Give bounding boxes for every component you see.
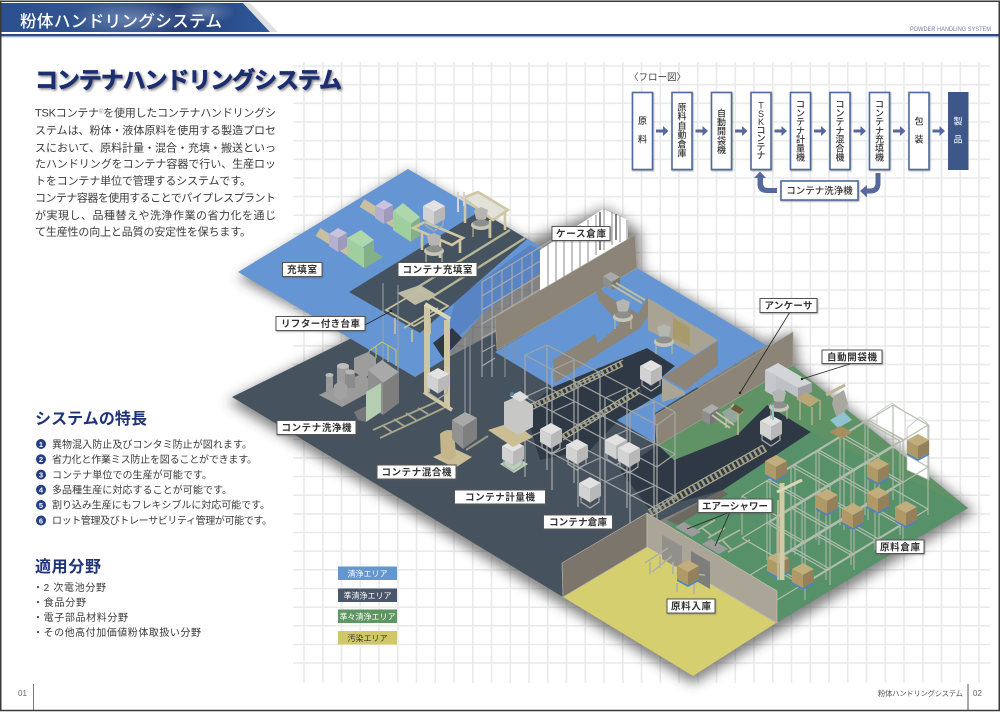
washer box: コンテナ洗浄機 (786, 185, 853, 197)
label: raw material warehouse (876, 540, 924, 554)
lifter tower (424, 304, 452, 410)
floor: darker pocket (525, 348, 675, 460)
label: uncaser (739, 298, 817, 394)
footer left: 01 (18, 689, 27, 698)
applications list: ・その他高付加価値粉体取扱い分野 (33, 626, 201, 639)
label: uncaser: アンケーサ (764, 301, 812, 312)
label: container warehouse: コンテナ倉庫 (549, 516, 607, 528)
machine block 1 (318, 228, 383, 268)
flow boxes: T (758, 100, 764, 110)
flow boxes: 動 (717, 117, 726, 128)
flow boxes: ナ (796, 126, 805, 136)
wall: long right wall (655, 332, 793, 446)
wall: goods-in back right (647, 513, 777, 623)
label: filling room: 充填室 (287, 264, 317, 276)
floor: contaminated yellow (563, 547, 776, 676)
wall: room back (648, 298, 718, 355)
flow boxes: 計 (796, 134, 805, 145)
flow boxes: 量 (796, 144, 805, 154)
applications list: ・2 次電池分野 (33, 581, 106, 594)
flow boxes: 自 (717, 108, 726, 118)
air shower doors (662, 535, 710, 589)
flow boxes: 機 (796, 151, 805, 162)
label: air shower (687, 499, 772, 546)
feature list: 6 (39, 516, 43, 525)
feature list: 割り込み生産にもフレキシブルに対応可能です。 (52, 499, 270, 512)
footer right: 02 (973, 689, 982, 698)
plant illustration (228, 169, 975, 684)
flow boxes: テ (756, 142, 766, 152)
small machine in clean room (603, 272, 645, 303)
floor: container filling room (349, 211, 527, 333)
conveyor in goods-in (645, 548, 705, 594)
flow boxes: テ (875, 117, 884, 127)
flow boxes: ン (835, 108, 845, 118)
applications list: ・食品分野 (33, 597, 86, 609)
rack: grey grid behind wall (482, 240, 552, 377)
conveyor near washer (373, 402, 444, 438)
walls: air shower rear wall (667, 490, 728, 525)
label: container filling room: コンテナ充填室 (402, 264, 472, 276)
feature list: 5 (39, 501, 43, 510)
flow boxes: ン (756, 134, 766, 144)
lifter cart (383, 283, 470, 445)
intro paragraph: が実現し、品種替えや洗浄作業の省力化を通じ (35, 208, 276, 222)
mixer (433, 412, 488, 468)
raw warehouse stacker (777, 480, 802, 580)
header title: 粉体ハンドリングシステム (20, 12, 222, 31)
applications list: ・電子部品材料分野 (33, 611, 128, 624)
feature list: コンテナ単位での生産が可能です。 (52, 468, 212, 481)
label: container warehouse (544, 515, 612, 529)
legend: 清浄エリア (348, 568, 388, 578)
feature list: 3 (39, 470, 43, 479)
label: lifter cart (276, 310, 392, 330)
label: container meter: コンテナ計量機 (465, 492, 535, 504)
flow boxes: テ (796, 117, 805, 127)
wall: room side (662, 378, 685, 402)
flow boxes: 機 (717, 144, 726, 155)
intro paragraph: を使用したコンテナハンドリングシ (103, 106, 276, 120)
intro paragraph: ステムは、粉体・液体原料を使用する製造プロセ (35, 123, 276, 137)
header banner (0, 0, 1000, 38)
rack: central container warehouse (525, 345, 675, 530)
flow boxes: 品 (953, 134, 963, 144)
flow boxes: 充 (875, 135, 884, 145)
feature list: 多品種生産に対応することが可能です。 (52, 484, 232, 496)
intro paragraph: ® (99, 109, 104, 116)
flow boxes: コ (835, 100, 845, 110)
heading: applications: 適用分野 (35, 557, 101, 576)
heading: system features: システムの特長 (35, 409, 147, 428)
conveyors: centre (525, 360, 767, 516)
label: case warehouse: ケース倉庫 (556, 228, 606, 240)
machine block 2 (362, 200, 420, 242)
intro paragraph: たハンドリングをコンテナ容器で行い、生産ロッ (35, 156, 276, 170)
flow arrows (656, 126, 945, 198)
floor: semi-clean dark area (232, 330, 811, 597)
filling room machines (318, 192, 508, 268)
flow boxes: ン (796, 108, 805, 118)
flow boxes: コ (756, 125, 766, 135)
white columns (877, 403, 905, 440)
goods-in bag (677, 560, 699, 587)
flow boxes: S (758, 109, 764, 119)
washer box (781, 181, 858, 200)
label: case warehouse (552, 226, 610, 240)
flow boxes: 自 (677, 120, 687, 131)
filling IBC (423, 200, 445, 231)
flow boxes: 動 (677, 129, 687, 140)
wall: room front (663, 341, 718, 390)
flow boxes: 填 (875, 142, 884, 154)
floor: dark shade under rack (443, 245, 560, 352)
feature list (36, 438, 272, 527)
legend: 汚染エリア (348, 633, 388, 643)
flow boxes: K (758, 117, 764, 127)
flow boxes: 料 (677, 111, 687, 122)
flow boxes (632, 92, 968, 170)
label: air shower: エアーシャワー (702, 501, 768, 512)
wall: inner partition (553, 334, 600, 383)
legend: 準々清浄エリア (340, 612, 396, 622)
applications list (33, 581, 201, 639)
raw material bags (765, 434, 929, 590)
flow boxes: ン (875, 108, 884, 118)
filling frame 1 (413, 222, 463, 258)
intro paragraph: て生産性の向上と品質の安定性を保ちます。 (35, 225, 251, 239)
label: lifter cart: リフター付き台車 (281, 318, 360, 330)
wall: curved partition (595, 265, 652, 353)
flow boxes: 原 (677, 102, 687, 112)
floor: clean area right room (495, 268, 766, 443)
flow boxes: 袋 (717, 135, 726, 146)
flow diagram (629, 72, 968, 200)
intro paragraph: スにおいて、原料計量・混合・充填・搬送といっ (35, 140, 276, 154)
label: container filling room (398, 262, 477, 276)
feature list: 1 (39, 440, 43, 449)
intro paragraph: TSKコンテナ (35, 108, 99, 120)
hoppers in clean room (613, 299, 674, 354)
rack: raw material warehouse (742, 403, 929, 600)
intro paragraph: コンテナ容器を使用することでパイプレスプラント (35, 192, 276, 205)
containers in warehouse (540, 360, 782, 508)
legend (338, 566, 397, 644)
label: container washer (277, 420, 356, 434)
floor shadow (228, 172, 975, 684)
flow boxes: ナ (875, 126, 884, 136)
depalletiser unit (826, 385, 852, 439)
label: container mixer (377, 465, 456, 479)
label: container meter (454, 490, 546, 504)
label: raw material warehouse: 原料倉庫 (880, 541, 920, 553)
main title: コンテナハンドリングシステム (35, 67, 342, 93)
flow heading: 〈フロー図〉 (629, 72, 686, 84)
feature list: 省力化と作業ミス防止を図ることができます。 (52, 453, 257, 466)
label: goods in (667, 599, 715, 613)
flow boxes: 混 (835, 134, 845, 145)
flow boxes: コ (796, 100, 805, 110)
label: goods in: 原料入庫 (671, 600, 711, 612)
feature list: 4 (39, 486, 44, 495)
footer left (18, 684, 34, 711)
floor: quasi clean green (658, 365, 968, 623)
feature list: ロット管理及びトレーサビリティ管理が可能です。 (52, 514, 272, 527)
label: container mixer: コンテナ混合機 (382, 466, 452, 478)
footer right (878, 684, 982, 711)
flow boxes: 原 (638, 116, 647, 126)
label: filling room (282, 262, 322, 276)
flow boxes: 装 (914, 134, 924, 144)
flow boxes: 製 (953, 116, 963, 126)
filling-room rails (410, 230, 525, 300)
rack: white case warehouse (540, 209, 628, 290)
safety fence (369, 342, 396, 366)
metering machine (488, 391, 533, 473)
feature list: 異物混入防止及びコンタミ防止が図れます。 (52, 438, 252, 451)
floor: clean area filling room (238, 169, 560, 377)
filling frame 2 (463, 192, 508, 238)
flow boxes: 料 (638, 134, 647, 144)
flow boxes: 機 (835, 151, 845, 162)
flow boxes: コ (875, 100, 884, 110)
label: auto bag opener (801, 350, 882, 380)
legend: 準清浄エリア (344, 590, 392, 600)
flow boxes: 開 (717, 127, 726, 137)
flow boxes: ナ (756, 150, 766, 160)
feature list: 2 (39, 455, 43, 464)
flow boxes: ナ (835, 126, 845, 136)
intro paragraph: トをコンテナ単位で管理するシステムです。 (35, 173, 251, 187)
flow boxes: テ (835, 117, 845, 127)
flow boxes: 庫 (677, 148, 687, 158)
intro paragraph (35, 106, 276, 239)
washer (319, 352, 399, 422)
uncaser (722, 404, 744, 435)
flow boxes: 機 (875, 151, 884, 162)
label: container washer: コンテナ洗浄機 (282, 422, 352, 434)
auto bag opener (765, 363, 820, 425)
flow boxes: 包 (914, 116, 924, 126)
footer right: 粉体ハンドリングシステム (878, 689, 963, 698)
pipe (458, 192, 464, 212)
wall: goods-in back left (562, 513, 647, 597)
wall: long upper wall (495, 235, 637, 350)
small machine green zone (702, 404, 734, 428)
door (673, 318, 690, 346)
flow boxes: 倉 (677, 138, 687, 149)
air shower units (675, 522, 728, 554)
conveyor after air shower (698, 520, 750, 552)
flow boxes: 合 (835, 142, 845, 154)
label: auto bag opener: 自動開袋機 (827, 351, 877, 363)
